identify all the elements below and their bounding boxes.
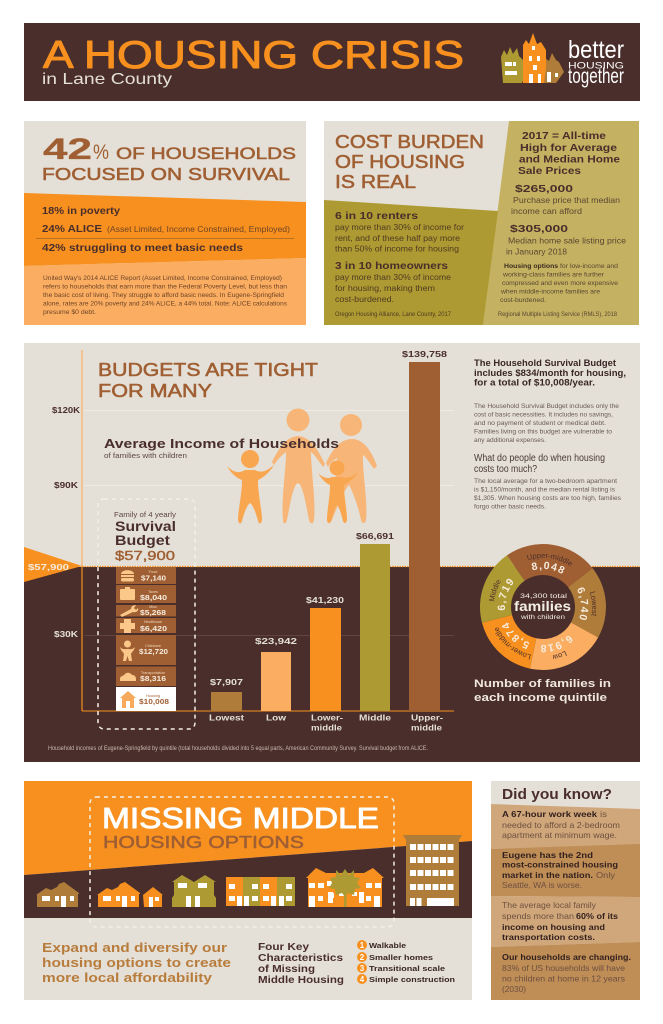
bar chart: income by quintile bbox=[209, 349, 447, 733]
numbered list: Walkable bbox=[369, 941, 406, 950]
home sale prices: Housing options for low-income and bbox=[504, 263, 618, 270]
ALICE explanation: alone, rates are 20% poverty and 24% ALICE, a 44% total. Note: ALICE calculations bbox=[43, 300, 287, 308]
renters and homeowners: for housing, making them bbox=[335, 283, 435, 293]
donut chart: families by quintile: 6,740 bbox=[578, 588, 588, 620]
text block: household survival budget: The Household Survival Budget includes only the bbox=[474, 403, 619, 410]
numbered list: 3 bbox=[360, 964, 365, 973]
bar chart: income by quintile: $66,691 bbox=[356, 531, 394, 541]
four key characteristics heading: Four Key bbox=[258, 942, 310, 953]
text block: household survival budget bbox=[474, 358, 626, 510]
budget stack bbox=[116, 567, 176, 711]
icon: child bbox=[120, 640, 135, 661]
fact 1: is bbox=[600, 809, 607, 819]
call to action bbox=[42, 940, 231, 985]
home sale prices: $305,000 bbox=[510, 223, 568, 235]
fact 1 bbox=[502, 809, 620, 840]
fact 2: Eugene has the 2nd bbox=[502, 850, 593, 860]
statistics list bbox=[36, 206, 294, 254]
bar chart: income by quintile: $7,907 bbox=[210, 677, 243, 687]
donut centre label: 34,300 total bbox=[520, 593, 568, 600]
budget stack: Childcare bbox=[145, 644, 161, 648]
numbered list bbox=[357, 940, 455, 984]
home sale prices: when middle-income families are bbox=[500, 288, 600, 296]
house: courtyard apartments bbox=[306, 868, 384, 907]
donut centre label bbox=[514, 593, 571, 621]
fact 2: Seattle, WA is worse. bbox=[502, 880, 582, 890]
heading: 42% of households: % bbox=[93, 141, 109, 164]
text block: household survival budget: includes $834/month for housing, bbox=[474, 368, 626, 378]
budget stack: Misc bbox=[149, 605, 157, 609]
bar chart: income by quintile: Lowest bbox=[209, 714, 245, 723]
home sale prices: Regional Multiple Listing Service (RMLS), 2018 bbox=[498, 312, 618, 318]
text block: household survival budget: cost of basic necessities. It includes no savings, bbox=[474, 412, 613, 418]
axis labels: $120K bbox=[52, 405, 81, 415]
heading: budgets are tight for many: BUDGETS ARE TIGHT bbox=[98, 360, 318, 380]
panel: 42% of households bbox=[24, 121, 306, 325]
houses illustration bbox=[36, 835, 462, 907]
bar chart: income by quintile: $139,758 bbox=[402, 349, 447, 359]
donut chart: families by quintile: Upper-middle bbox=[526, 554, 572, 566]
budget stack: Healthcare bbox=[144, 620, 162, 624]
fact 3: transportation costs. bbox=[502, 932, 595, 942]
fact 3: income on housing and bbox=[502, 922, 605, 932]
survival budget box: Budget bbox=[115, 533, 171, 548]
logo: Better Housing Together bbox=[501, 33, 624, 88]
budget stack: Housing bbox=[146, 694, 160, 698]
home sale prices: Sale Prices bbox=[518, 166, 582, 177]
donut caption: Number of families in bbox=[474, 678, 611, 690]
budget stack: $12,720 bbox=[139, 647, 168, 656]
renters and homeowners: pay more than 30% of income bbox=[335, 272, 451, 282]
four key characteristics heading: Characteristics bbox=[258, 953, 344, 964]
heading: cost burden of housing is real: IS REAL bbox=[335, 172, 416, 192]
panel: missing middle bbox=[24, 781, 472, 1000]
icon: food bbox=[121, 570, 134, 582]
budget stack: $7,140 bbox=[141, 574, 166, 582]
logo: Better Housing Together: better bbox=[568, 36, 624, 64]
home sale prices: 2017 = All-time bbox=[522, 131, 607, 142]
text block: household survival budget: The Household Survival Budget bbox=[474, 358, 616, 368]
heading: cost burden of housing is real: COST BURDEN bbox=[335, 132, 484, 152]
home sale prices: High for Average bbox=[520, 143, 618, 154]
house: fourplex bbox=[172, 875, 216, 907]
fact 2: market in the nation. bbox=[502, 870, 593, 880]
donut chart: families by quintile: Middle bbox=[489, 580, 500, 602]
budget stack: $8,316 bbox=[140, 674, 166, 683]
donut chart: families by quintile bbox=[480, 544, 606, 670]
ALICE explanation: the basic cost of living. They struggle to afford basic needs. In Eugene-Springfield bbox=[43, 292, 284, 299]
renters and homeowners bbox=[335, 211, 464, 318]
fact 4: 83% of US households will have bbox=[502, 963, 625, 973]
header banner bbox=[24, 23, 640, 101]
ALICE explanation: United Way's 2014 ALICE Report (Asset Limited, Income Constrained, Employed) bbox=[43, 275, 282, 282]
logo: Better Housing Together: together bbox=[568, 65, 624, 88]
heading: did you know: Did you know? bbox=[502, 786, 612, 803]
heading: 42% of households: FOCUSED ON SURVIVAL bbox=[42, 164, 290, 184]
renters and homeowners: Oregon Housing Alliance, Lane County, 2017 bbox=[335, 312, 452, 318]
renters and homeowners: 6 in 10 renters bbox=[335, 211, 419, 222]
home sale prices: Purchase price that median bbox=[513, 195, 620, 205]
heading: missing middle: HOUSING OPTIONS bbox=[103, 832, 304, 852]
numbered list: Transitional scale bbox=[369, 964, 445, 973]
ALICE explanation: presume $0 debt. bbox=[43, 309, 96, 316]
donut chart: families by quintile: Lower-middle bbox=[495, 627, 531, 660]
icon: family bbox=[227, 408, 377, 524]
house: rowhouses bbox=[226, 877, 295, 906]
heading: budgets are tight for many: FOR MANY bbox=[98, 381, 212, 401]
statistics list: 18% in poverty bbox=[42, 206, 120, 217]
bar chart: income by quintile: Lower- bbox=[311, 714, 343, 723]
source note: Household incomes of Eugene-Springfield by quintile (total households divided into 5 equal parts, American Community Survey. Survival budget from ALICE. bbox=[48, 745, 428, 752]
axis labels bbox=[52, 405, 81, 639]
donut chart: families by quintile: 8,048 bbox=[532, 562, 565, 574]
call to action: more local affordability bbox=[42, 970, 213, 985]
home sale prices: Median home sale listing price bbox=[508, 236, 626, 246]
donut chart: families by quintile: 5,874 bbox=[502, 622, 529, 650]
panel: cost burden bbox=[324, 121, 639, 325]
four key characteristics heading: of Missing bbox=[258, 964, 315, 975]
text block: household survival budget: any additional expenses. bbox=[474, 437, 546, 444]
marker: $57,900 threshold bbox=[24, 547, 82, 582]
ALICE explanation bbox=[43, 275, 287, 316]
donut chart: families by quintile: 6,719 bbox=[498, 578, 514, 610]
fact 2 bbox=[502, 850, 618, 890]
fact 1: apartment at minimum wage. bbox=[502, 830, 617, 840]
renters and homeowners: rent, and of these half pay more bbox=[335, 233, 460, 243]
chart heading: average income: Average Income of Households bbox=[104, 437, 339, 451]
axis labels: $30K bbox=[54, 629, 79, 639]
bar chart: income by quintile: Upper- bbox=[411, 714, 444, 723]
ALICE explanation: refers to households that earn more than the Federal Poverty Level, but less than bbox=[43, 284, 287, 290]
heading: missing middle: MISSING MIDDLE bbox=[102, 803, 379, 835]
budget stack: Taxes bbox=[148, 590, 158, 594]
fact 4 bbox=[502, 952, 631, 994]
statistics list: 42% struggling to meet basic needs bbox=[42, 243, 244, 254]
renters and homeowners: pay more than 30% of income for bbox=[335, 222, 464, 232]
icon: taxes bbox=[120, 587, 135, 600]
survival budget box: $57,900 bbox=[115, 549, 175, 563]
text block: household survival budget: Families living on this budget are vulnerable to bbox=[474, 428, 612, 436]
text block: household survival budget: forgo other basic needs. bbox=[474, 504, 546, 510]
heading: 42% of households bbox=[42, 133, 296, 184]
donut chart: families by quintile: Low bbox=[553, 651, 567, 660]
marker: $57,900 threshold: $57,900 bbox=[28, 562, 69, 572]
fact 4: (2030) bbox=[502, 984, 526, 994]
bar chart: income by quintile: middle bbox=[411, 724, 443, 733]
four key characteristics heading: Middle Housing bbox=[258, 975, 344, 986]
renters and homeowners: 3 in 10 homeowners bbox=[335, 261, 449, 272]
building: tower bbox=[403, 835, 462, 906]
fact 4: no children at home in 12 years bbox=[502, 974, 625, 984]
budget stack: $10,008 bbox=[139, 697, 169, 706]
home sale prices: cost-burdened. bbox=[500, 297, 546, 304]
subtitle: in Lane County bbox=[42, 71, 172, 88]
fact 3: The average local family bbox=[502, 900, 597, 910]
numbered list: 2 bbox=[360, 953, 365, 962]
panel: budgets are tight bbox=[24, 343, 640, 762]
bar chart: income by quintile: Low bbox=[266, 714, 287, 723]
bar chart: income by quintile: middle bbox=[311, 724, 343, 733]
chart heading: average income bbox=[104, 437, 339, 460]
donut chart: families by quintile: 6,918 bbox=[541, 636, 572, 652]
house: duplex small bbox=[97, 882, 163, 907]
four key characteristics heading bbox=[258, 942, 344, 986]
bar chart: income by quintile: $23,942 bbox=[255, 636, 297, 646]
home sale prices: in January 2018 bbox=[506, 246, 567, 256]
icon: house bbox=[120, 691, 136, 708]
statistics list: 24% ALICE bbox=[42, 223, 102, 235]
logo: Better Housing Together: HOUSING bbox=[568, 60, 624, 70]
heading: budgets are tight for many bbox=[98, 360, 318, 401]
numbered list: 1 bbox=[360, 941, 365, 950]
call to action: Expand and diversify our bbox=[42, 940, 227, 955]
budget stack: $6,420 bbox=[140, 624, 167, 633]
fact 2: Only bbox=[596, 870, 616, 880]
text block: household survival budget: What do people do when housing bbox=[474, 453, 605, 464]
donut centre label: families bbox=[514, 598, 571, 614]
axis labels: $90K bbox=[54, 480, 79, 490]
statistics list: (Asset Limited, Income Constrained, Employed) bbox=[107, 224, 290, 234]
text block: household survival budget: for a total of $10,008/year. bbox=[474, 378, 595, 388]
heading: cost burden of housing is real bbox=[335, 132, 484, 192]
heading: cost burden of housing is real: OF HOUSING bbox=[335, 152, 465, 172]
budget stack: $5,268 bbox=[140, 608, 166, 617]
renters and homeowners: than 50% of income for housing bbox=[335, 244, 459, 254]
text block: household survival budget: $1,305. When housing costs are too high, families bbox=[474, 495, 621, 502]
donut caption: each income quintile bbox=[474, 692, 607, 704]
home sale prices: and Median Home bbox=[519, 154, 621, 166]
home sale prices: income can afford bbox=[511, 206, 582, 216]
budget stack: Transportation bbox=[141, 671, 165, 675]
icon: tree bbox=[329, 869, 361, 907]
numbered list: Simple construction bbox=[369, 975, 455, 984]
survival budget box bbox=[98, 499, 195, 729]
numbered list: Smaller homes bbox=[369, 953, 433, 962]
donut centre label: with children bbox=[520, 615, 565, 621]
title: A HOUSING CRISIS bbox=[43, 34, 464, 77]
numbered list: 4 bbox=[360, 975, 365, 984]
text block: household survival budget: and no payment of student or medical debt. bbox=[474, 420, 606, 427]
survival budget box: Family of 4 yearly bbox=[114, 512, 177, 519]
heading: 42% of households: OF HOUSEHOLDS bbox=[116, 145, 296, 163]
panel: did you know bbox=[491, 781, 640, 1000]
survival budget box: Survival bbox=[115, 519, 176, 534]
budget stack: $8,040 bbox=[140, 593, 167, 602]
heading: 42% of households: 42 bbox=[43, 133, 92, 166]
icon: car bbox=[120, 673, 136, 681]
fact 3 bbox=[502, 900, 618, 942]
bar chart: income by quintile: Middle bbox=[359, 714, 392, 723]
budget stack: Food bbox=[149, 570, 157, 574]
donut chart: families by quintile: Lowest bbox=[590, 591, 596, 616]
heading: missing middle bbox=[102, 803, 379, 852]
call to action: housing options to create bbox=[42, 955, 231, 970]
text block: household survival budget: The local average for a two-bedroom apartment bbox=[474, 478, 617, 485]
home sale prices: $265,000 bbox=[515, 183, 573, 195]
home sale prices: working-class families are further bbox=[502, 272, 605, 278]
fact 3: spends more than bbox=[502, 911, 574, 921]
home sale prices: compressed and even more expensive bbox=[502, 280, 618, 287]
donut caption bbox=[474, 678, 611, 704]
bar chart: income by quintile: $41,230 bbox=[306, 595, 344, 605]
fact 2: most-constrained housing bbox=[502, 860, 618, 870]
text block: household survival budget: is $1,150/month, and the median rental listing is bbox=[474, 486, 615, 494]
text block: household survival budget: costs too much? bbox=[474, 464, 537, 475]
house: single family bbox=[36, 882, 79, 907]
fact 1: A 67-hour work week bbox=[502, 809, 597, 819]
home sale prices bbox=[498, 131, 626, 318]
icon: healthcare cross bbox=[120, 619, 135, 633]
renters and homeowners: cost-burdened. bbox=[335, 294, 394, 304]
fact 4: Our households are changing. bbox=[502, 952, 631, 962]
icon: wrench bbox=[120, 605, 138, 617]
fact 3: 60% of its bbox=[576, 911, 618, 921]
chart heading: average income: of families with children bbox=[104, 453, 187, 460]
fact 1: needed to afford a 2-bedroom bbox=[502, 820, 620, 830]
